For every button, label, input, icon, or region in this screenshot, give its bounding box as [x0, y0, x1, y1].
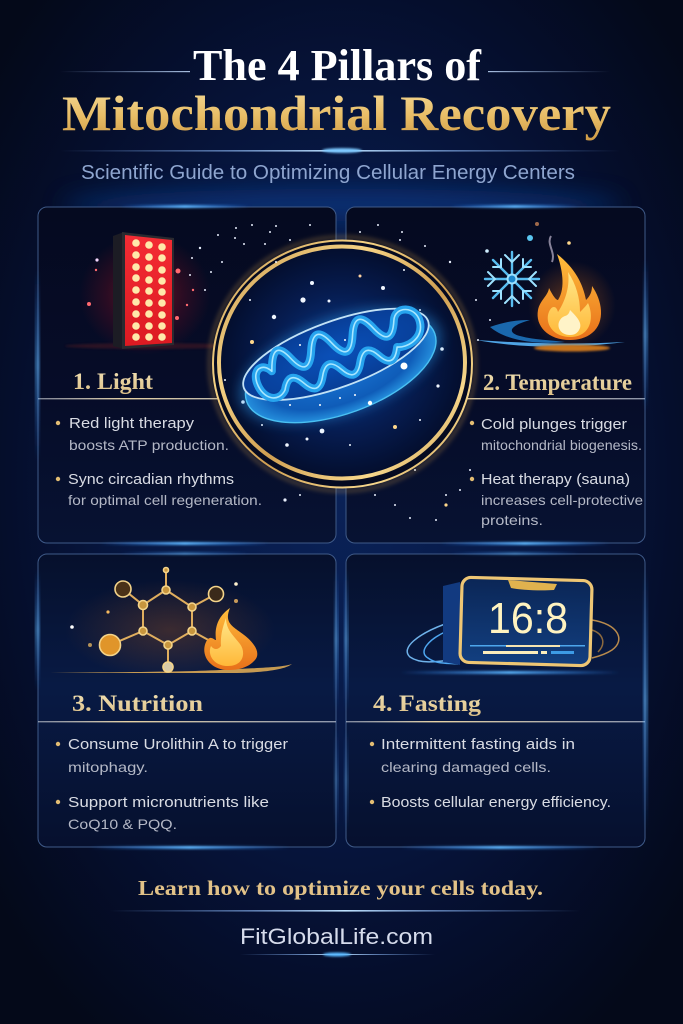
molecule atoms	[100, 568, 224, 672]
bullets: light: boosts ATP production.	[69, 437, 229, 453]
bullets: nutrition: CoQ10 & PQQ.	[68, 816, 177, 832]
title line two: Mitochondrial Recovery	[62, 85, 611, 141]
cristae	[248, 300, 429, 407]
molecule bonds	[110, 570, 216, 667]
bullets: temperature: Heat therapy (sauna)	[481, 472, 630, 488]
website: FitGlobalLife.com	[240, 924, 433, 949]
mitochondrion	[224, 284, 456, 447]
call to action: Learn how to optimize your cells today.	[138, 876, 543, 900]
header divider	[346, 398, 645, 399]
header divider	[38, 721, 336, 722]
bullets: fasting: Boosts cellular energy efficiency.	[381, 795, 611, 811]
bullets: fasting: clearing damaged cells.	[381, 759, 551, 775]
panel: 4 Fasting	[346, 554, 645, 847]
inner disc	[219, 246, 465, 478]
bullets: fasting	[370, 737, 611, 811]
timer body	[443, 582, 460, 665]
progress bars	[470, 645, 585, 654]
header divider	[38, 398, 336, 399]
website underline	[240, 952, 435, 956]
title underline glow	[60, 148, 620, 153]
flame	[538, 254, 601, 340]
icon: red light therapy panel	[65, 232, 235, 355]
flame	[204, 608, 257, 670]
water and fire wave	[490, 320, 565, 343]
bullets: nutrition: Consume Urolithin A to trigger	[68, 737, 288, 753]
bullets: light	[56, 416, 262, 508]
heading: 1. Light	[73, 369, 153, 394]
icon: 16:8 timer	[400, 577, 620, 674]
bullets: light: for optimal cell regeneration.	[68, 492, 262, 508]
top opening	[233, 290, 439, 419]
panel: 2 Temperature	[346, 207, 645, 543]
footer	[110, 876, 580, 956]
bullets: nutrition: Support micronutrients like	[68, 795, 269, 811]
heading: 4. Fasting	[373, 691, 482, 716]
panel: 1 Light	[38, 207, 336, 543]
outer membrane	[231, 290, 450, 445]
mitochondrion sparkles	[289, 339, 408, 406]
glow above panels	[62, 189, 622, 221]
bullets: temperature	[470, 417, 643, 528]
header divider	[346, 721, 645, 722]
title block	[60, 41, 620, 184]
footer rule	[110, 910, 580, 912]
heading: 3. Nutrition	[72, 691, 203, 716]
bullets: nutrition: mitophagy.	[68, 759, 148, 775]
starfield around central circle	[189, 224, 491, 521]
gold ring	[213, 240, 472, 488]
bullets: fasting: Intermittent fasting aids in	[381, 737, 575, 753]
bullets: light: Sync circadian rhythms	[68, 472, 234, 488]
bullets: temperature: proteins.	[481, 512, 543, 528]
bullets: temperature: Cold plunges trigger	[481, 417, 627, 433]
bullets: light: Red light therapy	[69, 416, 195, 432]
bullets: temperature: mitochondrial biogenesis.	[481, 437, 642, 453]
icon: snowflake and flame	[476, 222, 625, 352]
central mitochondrion medallion	[210, 237, 476, 491]
timer readout: 16:8	[488, 594, 568, 643]
subtitle: Scientific Guide to Optimizing Cellular Energy Centers	[81, 162, 575, 184]
title line one: The 4 Pillars of	[193, 41, 482, 90]
outer glow	[210, 237, 476, 491]
disc stars	[224, 261, 444, 447]
bullets: nutrition	[56, 737, 288, 832]
bullets: temperature: increases cell-protective	[481, 492, 643, 508]
title rule right	[488, 71, 610, 72]
icon: molecule and flame	[50, 568, 292, 680]
snowflake	[485, 252, 539, 306]
panel edge glows	[36, 205, 647, 849]
orbit rings	[407, 620, 619, 664]
panel: 3 Nutrition	[38, 554, 336, 847]
gold tab	[508, 580, 557, 590]
heading: 2. Temperature	[483, 370, 632, 395]
title rule left	[60, 71, 190, 72]
